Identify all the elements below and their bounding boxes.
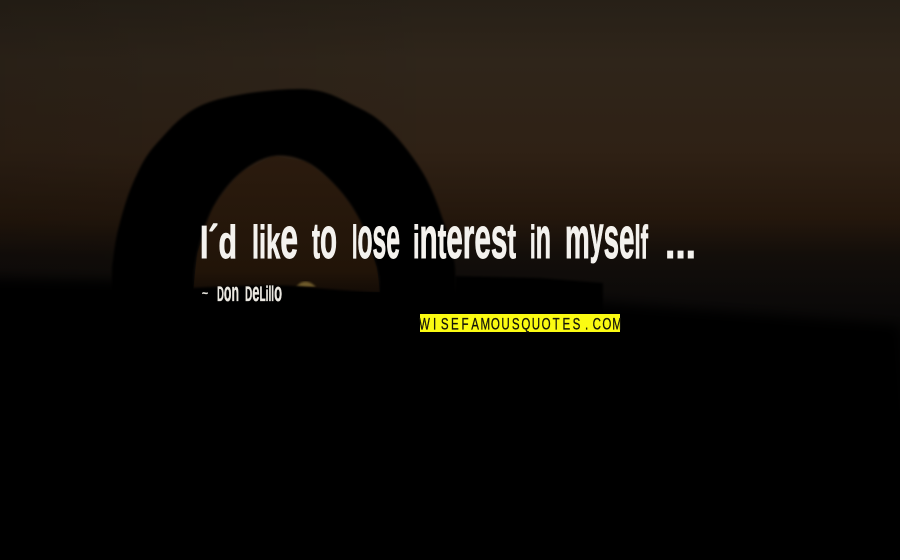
watermark badge: WISEFAMOUSQUOTES.COM	[419, 315, 622, 334]
quote text: in	[530, 206, 551, 271]
quote text: like	[252, 206, 298, 271]
quote text: ...	[665, 216, 696, 268]
author attribution: Don	[217, 277, 239, 307]
sun on the horizon	[296, 282, 316, 287]
sky seen through arch	[193, 156, 380, 292]
quote text: se	[604, 206, 635, 271]
quote text	[200, 206, 696, 271]
quote text: m	[565, 206, 590, 271]
quote text: y	[590, 206, 604, 264]
arch silhouette	[112, 89, 457, 330]
author attribution: ~	[202, 288, 209, 300]
quote text: lose	[352, 206, 400, 271]
ground inside arch	[190, 285, 384, 330]
author attribution	[202, 277, 282, 307]
dark ground and horizon	[0, 278, 900, 560]
quote text: interest	[413, 206, 516, 271]
quote text: lf	[635, 216, 663, 268]
author attribution: DeLillo	[245, 277, 282, 307]
quote text: to	[312, 206, 337, 271]
distant building silhouette	[455, 276, 603, 330]
quote text: I´d	[200, 216, 237, 268]
